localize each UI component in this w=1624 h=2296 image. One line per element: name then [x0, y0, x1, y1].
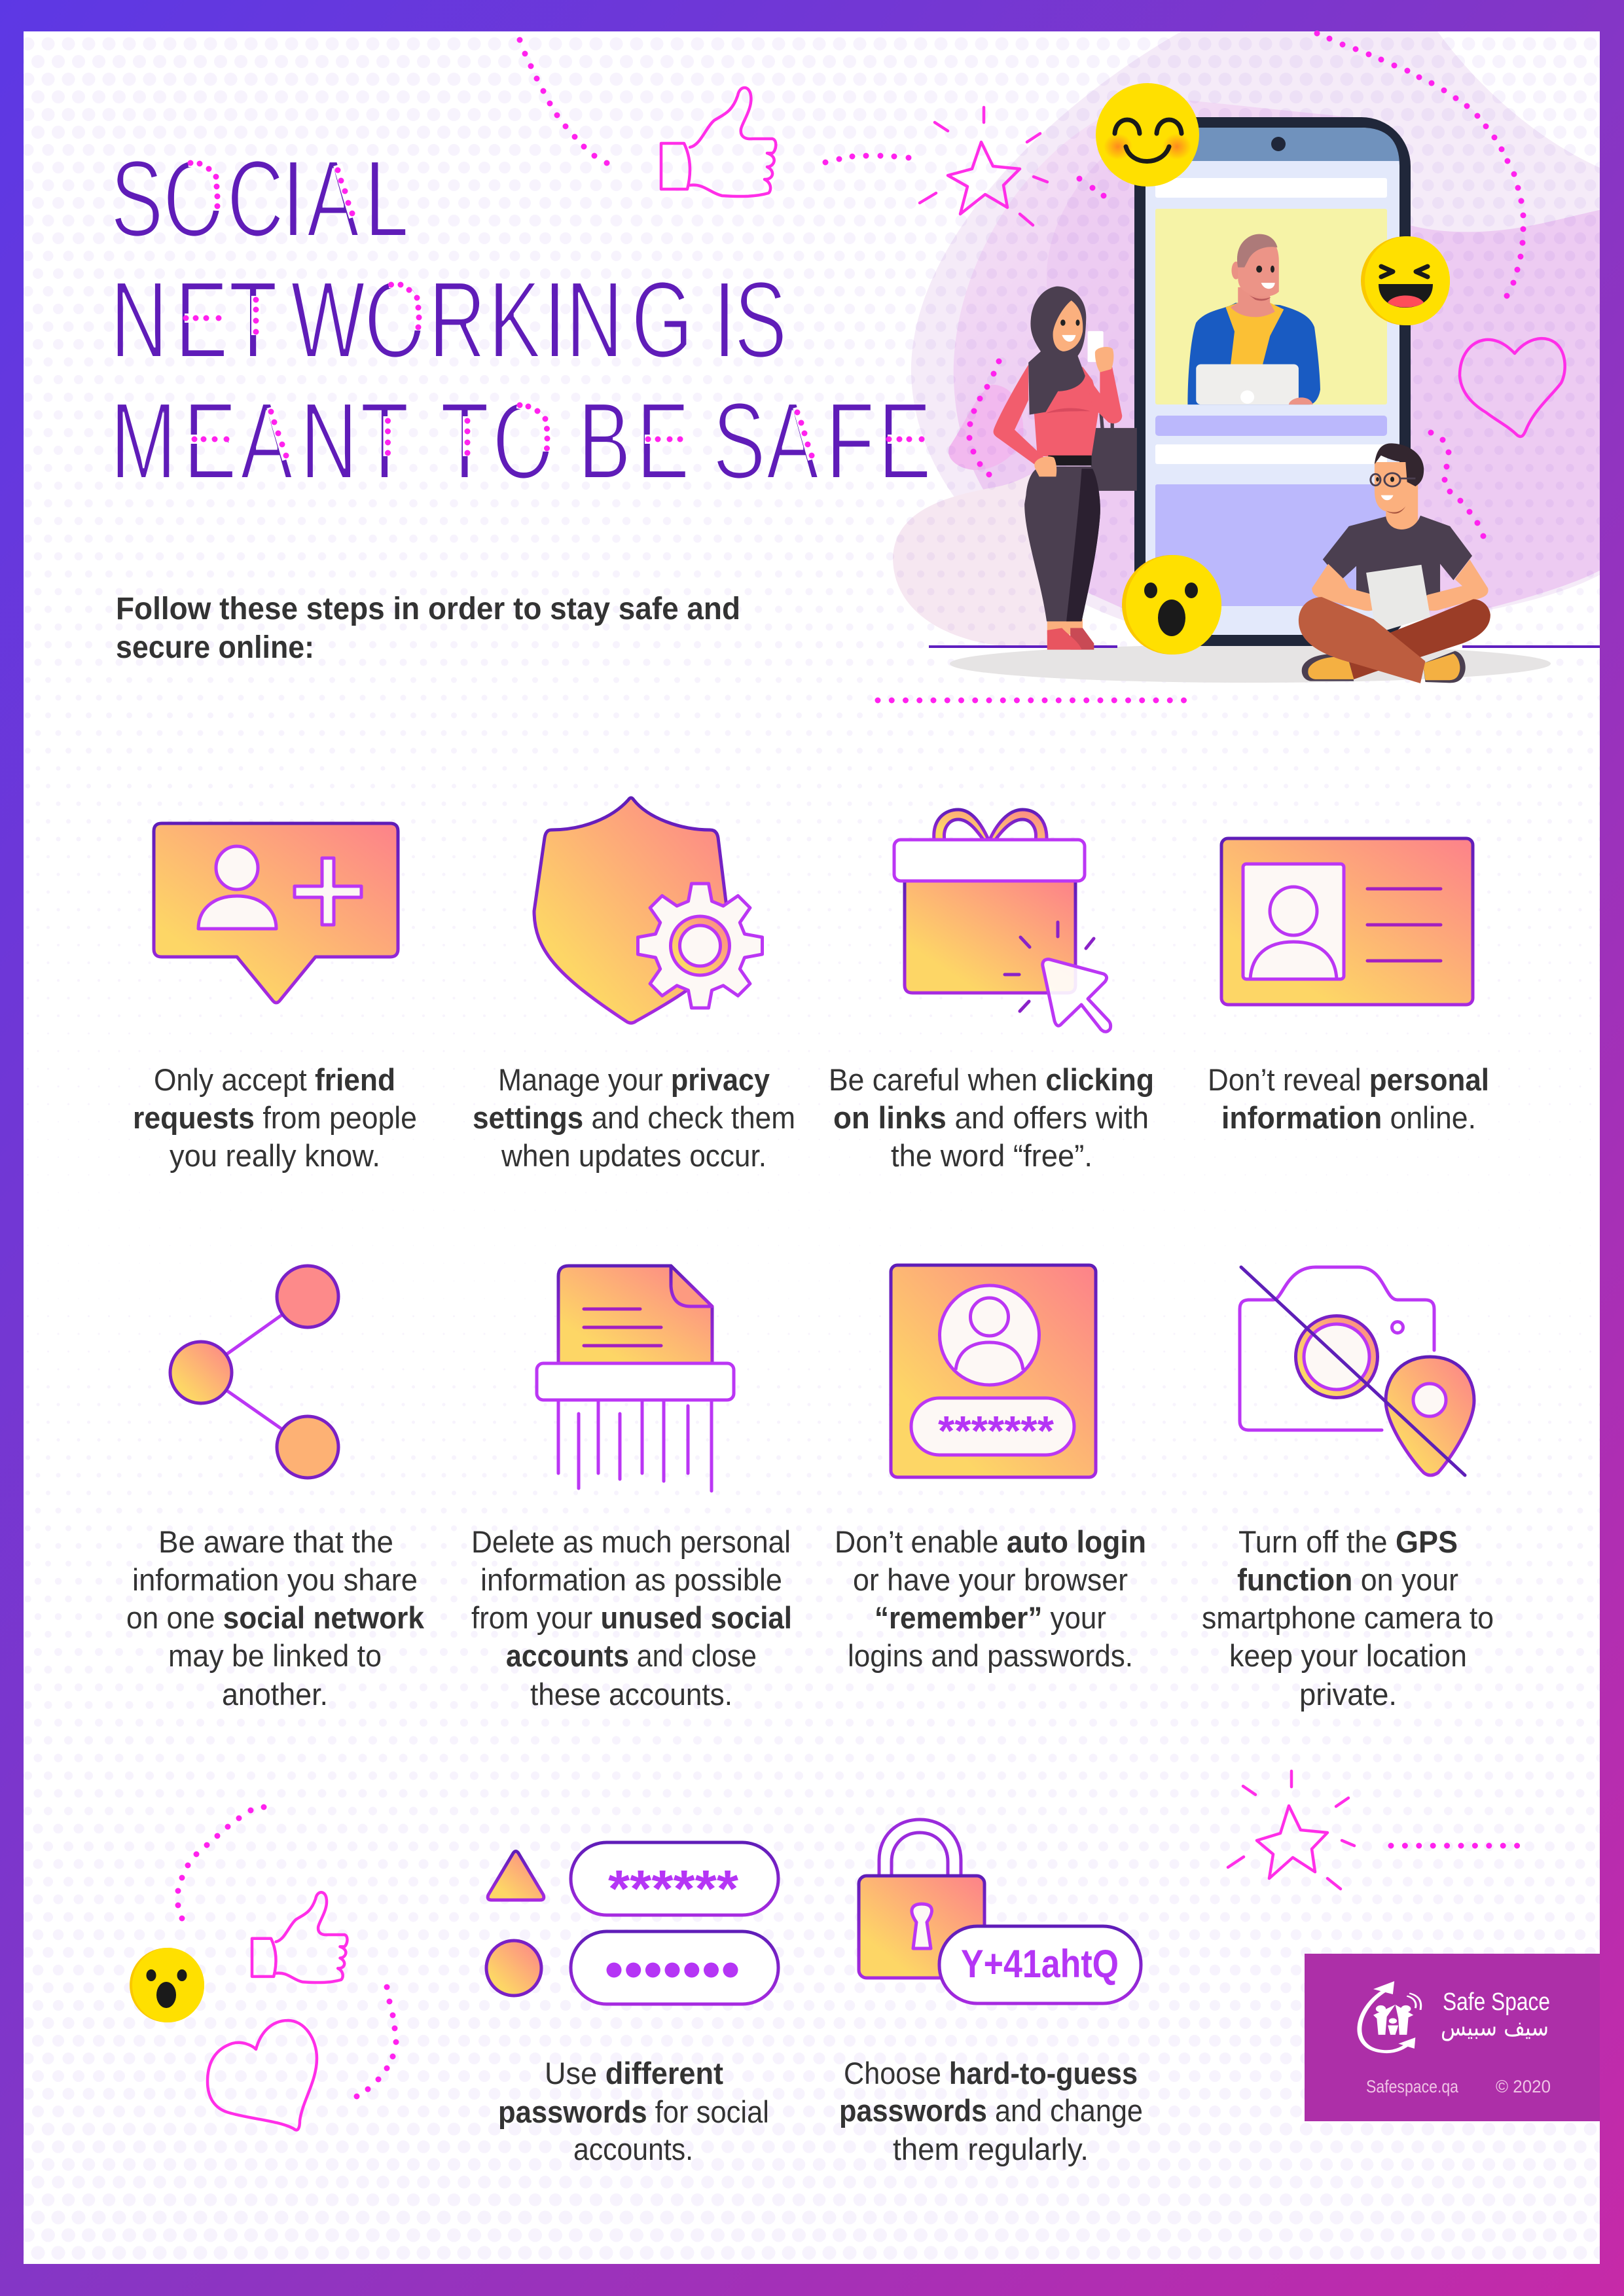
step 1: friend requests [133, 823, 417, 1173]
text: accounts and close [506, 1638, 757, 1673]
decoration: dotted trails top [520, 33, 1523, 536]
text: Be aware that the [158, 1524, 393, 1559]
text: Don’t reveal personal [1208, 1062, 1489, 1097]
text: Manage your privacy [498, 1062, 770, 1097]
illustration: seated man with tablet [1299, 443, 1490, 683]
step 2: privacy settings [473, 798, 795, 1173]
step 5: social network [126, 1266, 425, 1712]
icon: password pills [486, 1842, 778, 2004]
illustration: man on phone screen [1187, 234, 1320, 404]
logo block [1305, 1954, 1600, 2121]
text [835, 1524, 1146, 1673]
text: requests from people [133, 1100, 417, 1135]
text [839, 2056, 1143, 2166]
intro text: secure online: [116, 630, 314, 665]
text: “remember” your [875, 1600, 1106, 1635]
step 6: unused accounts [471, 1266, 792, 1712]
text: Use different [545, 2056, 723, 2090]
text [498, 2056, 769, 2166]
decoration: star bottom [1228, 1771, 1354, 1889]
intro text [116, 592, 740, 665]
decoration: dotted row under illustration [878, 698, 1186, 703]
icon: ID card [1221, 838, 1473, 1005]
text: or have your browser [853, 1562, 1128, 1597]
text [829, 1062, 1154, 1173]
ground shadow [950, 645, 1551, 683]
text: keep your location [1229, 1638, 1467, 1673]
icon: share network [170, 1266, 338, 1478]
logo symbol [1360, 1981, 1421, 2052]
step 10: hard-to-guess passwords [839, 1820, 1143, 2166]
text: these accounts. [530, 1677, 732, 1712]
icon: camera with location pin crossed out [1240, 1267, 1474, 1475]
icon: padlock with password [859, 1820, 1141, 2003]
text: on one social network [126, 1600, 425, 1635]
text: the word “free”. [891, 1138, 1092, 1173]
icon: padlock with password: Y+41ahtQ [961, 1942, 1119, 1986]
text [1202, 1524, 1494, 1712]
text: Only accept friend [154, 1062, 395, 1097]
text: information you share [132, 1562, 418, 1597]
icon: gift box with cursor [894, 810, 1111, 1031]
text: may be linked to [168, 1638, 382, 1673]
text: them regularly. [893, 2132, 1089, 2166]
icon: login card [891, 1265, 1096, 1477]
emoji: laughing [1361, 236, 1450, 325]
step 7: auto login [835, 1265, 1146, 1673]
text: you really know. [170, 1138, 380, 1173]
logo block: سيف سبيس [1441, 2015, 1549, 2041]
step 8: GPS function [1202, 1267, 1494, 1712]
decoration: heart bottom [208, 2020, 317, 2130]
text: passwords for social [498, 2094, 769, 2129]
decoration: thumbs up top [661, 88, 776, 196]
emoji: surprised [1122, 555, 1221, 655]
text [126, 1524, 425, 1712]
text: settings and check them [473, 1100, 795, 1135]
title [111, 137, 931, 502]
ground line [929, 645, 1600, 648]
text: accounts. [573, 2132, 693, 2166]
title: NETWORKING IS [111, 259, 787, 381]
intro text: Follow these steps in order to stay safe and [116, 592, 740, 626]
text: Turn off the GPS [1238, 1524, 1458, 1559]
title: MEANT TO BE SAFE [111, 380, 931, 502]
text: information online. [1221, 1100, 1476, 1135]
text [473, 1062, 795, 1173]
decoration: dotted row bottom [1391, 1843, 1519, 1848]
icon: speech bubble with add-friend [154, 823, 398, 1003]
text: on links and offers with [833, 1100, 1149, 1135]
decoration: star top [920, 107, 1047, 225]
icon: shield with gear [534, 798, 762, 1023]
title: SOCIAL [111, 137, 408, 260]
text: logins and passwords. [848, 1638, 1133, 1673]
icon: paper shredder [537, 1266, 734, 1491]
logo block: Safe Space [1443, 1988, 1550, 2016]
text: another. [222, 1677, 328, 1712]
emoji: surprised small [130, 1948, 204, 2022]
icon: login card: ******* [938, 1407, 1054, 1454]
text: from your unused social [471, 1600, 792, 1635]
step 3: clicking on links [829, 810, 1154, 1173]
step 4: personal information [1208, 838, 1489, 1135]
text: private. [1299, 1677, 1397, 1712]
text: smartphone camera to [1202, 1600, 1494, 1635]
text [1208, 1062, 1489, 1135]
text: Don’t enable auto login [835, 1524, 1146, 1559]
text: when updates occur. [501, 1138, 767, 1173]
text: function on your [1237, 1562, 1458, 1597]
illustration: smartphone [1134, 117, 1411, 646]
background blobs [893, 31, 1600, 646]
text: information as possible [480, 1562, 782, 1597]
text [471, 1524, 792, 1712]
decoration: dotted trails bottom left [178, 1807, 396, 2096]
illustration: woman in hijab [994, 287, 1137, 650]
text: passwords and change [839, 2093, 1143, 2128]
text: Delete as much personal [471, 1524, 791, 1559]
decoration: heart top [1460, 338, 1565, 437]
text: Be careful when clicking [829, 1062, 1154, 1097]
logo block: © 2020 [1496, 2077, 1551, 2096]
text: Choose hard-to-guess [844, 2056, 1138, 2090]
icon: password pills: ****** [608, 1859, 739, 1918]
emoji: smiling [1096, 83, 1199, 187]
text [133, 1062, 417, 1173]
step 9: different passwords [486, 1842, 778, 2166]
decoration: thumbs up bottom [252, 1892, 347, 1982]
logo block: Safespace.qa [1366, 2077, 1459, 2096]
